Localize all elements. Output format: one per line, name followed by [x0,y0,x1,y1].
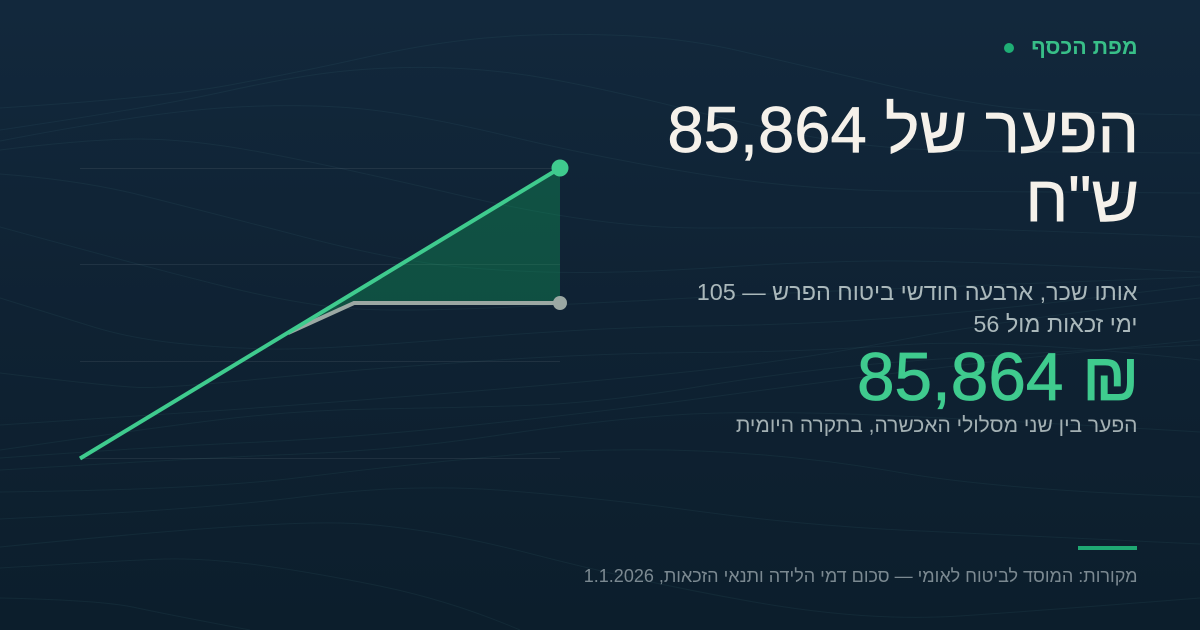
grey line: shorter leave [288,303,560,333]
big number: ₪ 85,864 [857,340,1140,415]
accent bar [1078,546,1137,550]
gap area between the two lines [290,168,560,332]
green line: longer leave [80,168,560,458]
brand dot [1004,43,1014,53]
brand label: מפת הכסף [1031,35,1138,59]
title: הפער של 85,864 [667,93,1139,166]
grey end point [553,296,567,310]
description: ימי זכאות מול 56 [973,311,1138,337]
big number caption: הפער בין שני מסלולי האכשרה, בתקרה היומית [736,414,1138,437]
title: ש"ח [1025,162,1139,235]
green end point [552,160,568,176]
description: אותו שכר, ארבעה חודשי ביטוח הפרש — 105 [697,279,1138,305]
sources: מקורות: המוסד לביטוח לאומי — סכום דמי הלידה ותנאי הזכאות, 1.1.2026 [584,566,1138,586]
description [697,279,1138,337]
title [667,93,1139,235]
